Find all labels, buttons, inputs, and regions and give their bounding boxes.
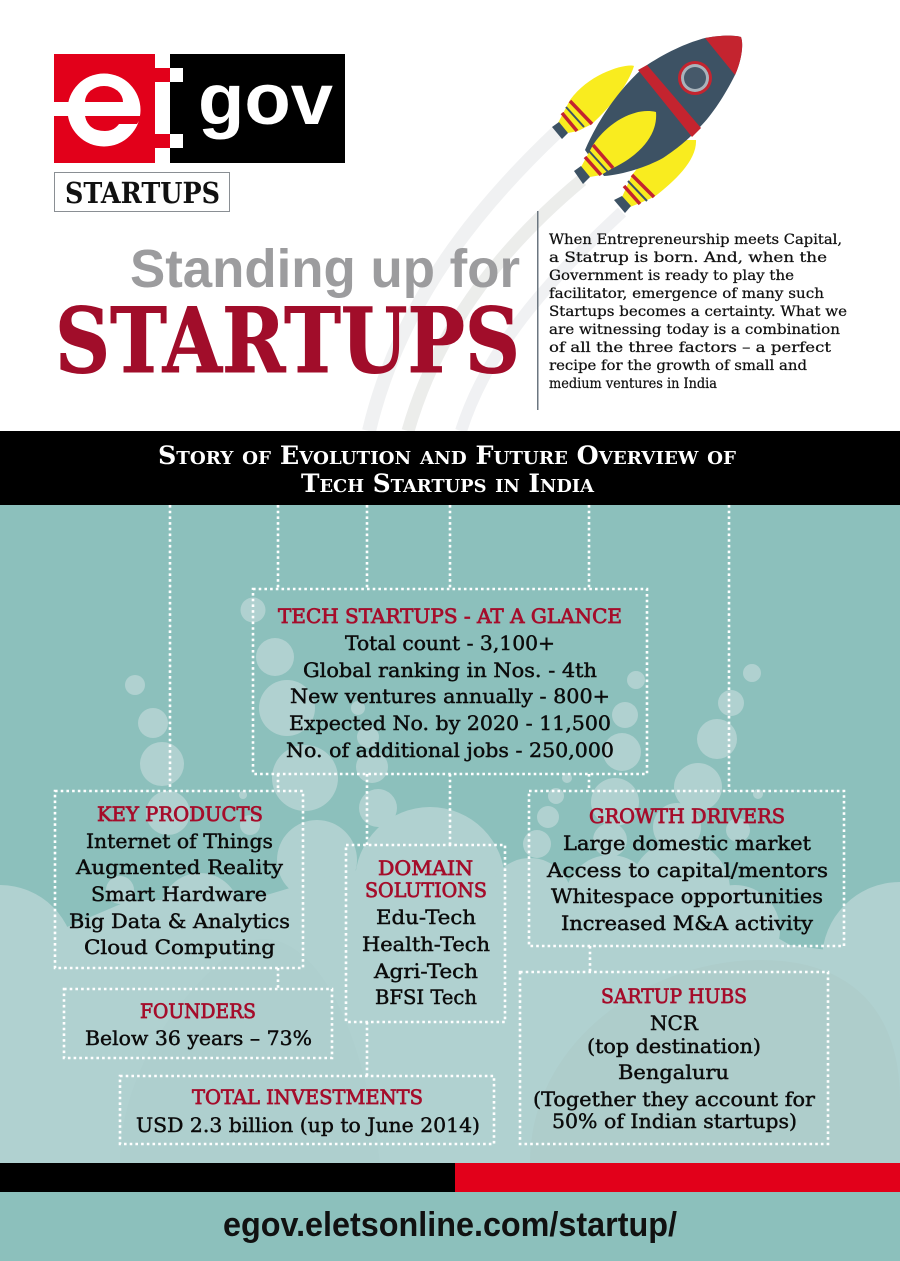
icon: rocket <box>552 36 742 213</box>
panel: tech startups at a glance: Global ranking in Nos. - 4th <box>303 658 597 682</box>
panel: key products: Big Data & Analytics <box>69 909 290 933</box>
panel: growth drivers: GROWTH DRIVERS <box>589 804 785 828</box>
panel: growth drivers <box>529 791 844 946</box>
panel: key products: KEY PRODUCTS <box>97 802 263 826</box>
panel: domain solutions: Health-Tech <box>362 932 490 956</box>
panel: tech startups at a glance: Total count - 3,100+ <box>345 631 555 655</box>
panel: startup hubs <box>520 972 828 1144</box>
panel: startup hubs: Bengaluru <box>618 1060 729 1084</box>
banner: Tech Startups in India <box>301 469 595 498</box>
panel: tech startups at a glance: New ventures annually - 800+ <box>290 684 610 708</box>
panel: total investments: TOTAL INVESTMENTS <box>192 1085 423 1109</box>
intro paragraph: of all the three factors – a perfect <box>549 340 831 356</box>
panel: domain solutions <box>346 845 505 1022</box>
intro paragraph: medium ventures in India <box>549 376 717 392</box>
panel: domain solutions: SOLUTIONS <box>365 878 487 902</box>
panel: growth drivers: Access to capital/mentors <box>546 858 828 882</box>
panel: total investments <box>120 1076 494 1144</box>
section tag: STARTUPS: STARTUPS <box>65 176 220 210</box>
intro paragraph: Startups becomes a certainty. What we <box>549 304 847 320</box>
intro paragraph: a Statrup is born. And, when the <box>549 250 827 266</box>
panel: founders <box>64 989 332 1058</box>
panel: growth drivers: Increased M&A activity <box>561 911 814 935</box>
panel: startup hubs: SARTUP HUBS <box>601 984 747 1008</box>
intro paragraph: Government is ready to play the <box>549 268 794 284</box>
panel: startup hubs: (Together they account for <box>533 1087 815 1111</box>
panel: tech startups at a glance: TECH STARTUPS - AT A GLANCE <box>278 604 622 628</box>
panel: founders: Below 36 years – 73% <box>85 1026 312 1050</box>
panel: key products: Cloud Computing <box>84 935 275 959</box>
panel: tech startups at a glance <box>253 589 647 774</box>
logo: eGov <box>54 54 345 163</box>
panel: domain solutions: Edu-Tech <box>376 905 476 929</box>
panel: tech startups at a glance: No. of additional jobs - 250,000 <box>286 738 614 762</box>
logo: eGov: gov <box>198 60 333 140</box>
teal background with bubbles and clouds <box>0 505 900 1163</box>
panel: founders: FOUNDERS <box>140 999 256 1023</box>
intro paragraph <box>549 232 847 392</box>
panel: domain solutions: Agri-Tech <box>373 959 478 983</box>
title <box>55 239 520 394</box>
title: Standing up for <box>130 239 520 299</box>
panel: startup hubs: 50% of Indian startups) <box>552 1109 797 1133</box>
title: STARTUPS <box>55 288 520 394</box>
divider <box>537 211 538 410</box>
intro paragraph: When Entrepreneurship meets Capital, <box>549 232 842 248</box>
footer url <box>0 1192 900 1261</box>
footer color bar <box>0 1163 900 1192</box>
panel: startup hubs: NCR <box>650 1011 699 1035</box>
panel: tech startups at a glance: Expected No. by 2020 - 11,500 <box>289 711 611 735</box>
panel: key products: Augmented Reality <box>75 855 284 879</box>
intro paragraph: are witnessing today is a combination <box>549 322 840 338</box>
panel: key products <box>55 791 303 968</box>
panel: domain solutions: DOMAIN <box>378 856 473 880</box>
panel: growth drivers: Large domestic market <box>563 831 811 855</box>
panel: key products: Smart Hardware <box>91 882 267 906</box>
connectors <box>170 505 729 1076</box>
banner <box>0 431 900 505</box>
footer url: egov.eletsonline.com/startup/ <box>223 1206 678 1244</box>
rocket exhaust trails <box>369 132 622 431</box>
intro paragraph: facilitator, emergence of many such <box>549 286 824 302</box>
banner: Story of Evolution and Future Overview of <box>158 441 736 470</box>
intro paragraph: recipe for the growth of small and <box>549 358 807 374</box>
panel: growth drivers: Whitespace opportunities <box>551 884 823 908</box>
panel: domain solutions: BFSI Tech <box>375 985 477 1009</box>
panel: startup hubs: (top destination) <box>587 1034 761 1058</box>
panel: key products: Internet of Things <box>86 829 273 853</box>
panel: total investments: USD 2.3 billion (up to June 2014) <box>136 1113 480 1137</box>
